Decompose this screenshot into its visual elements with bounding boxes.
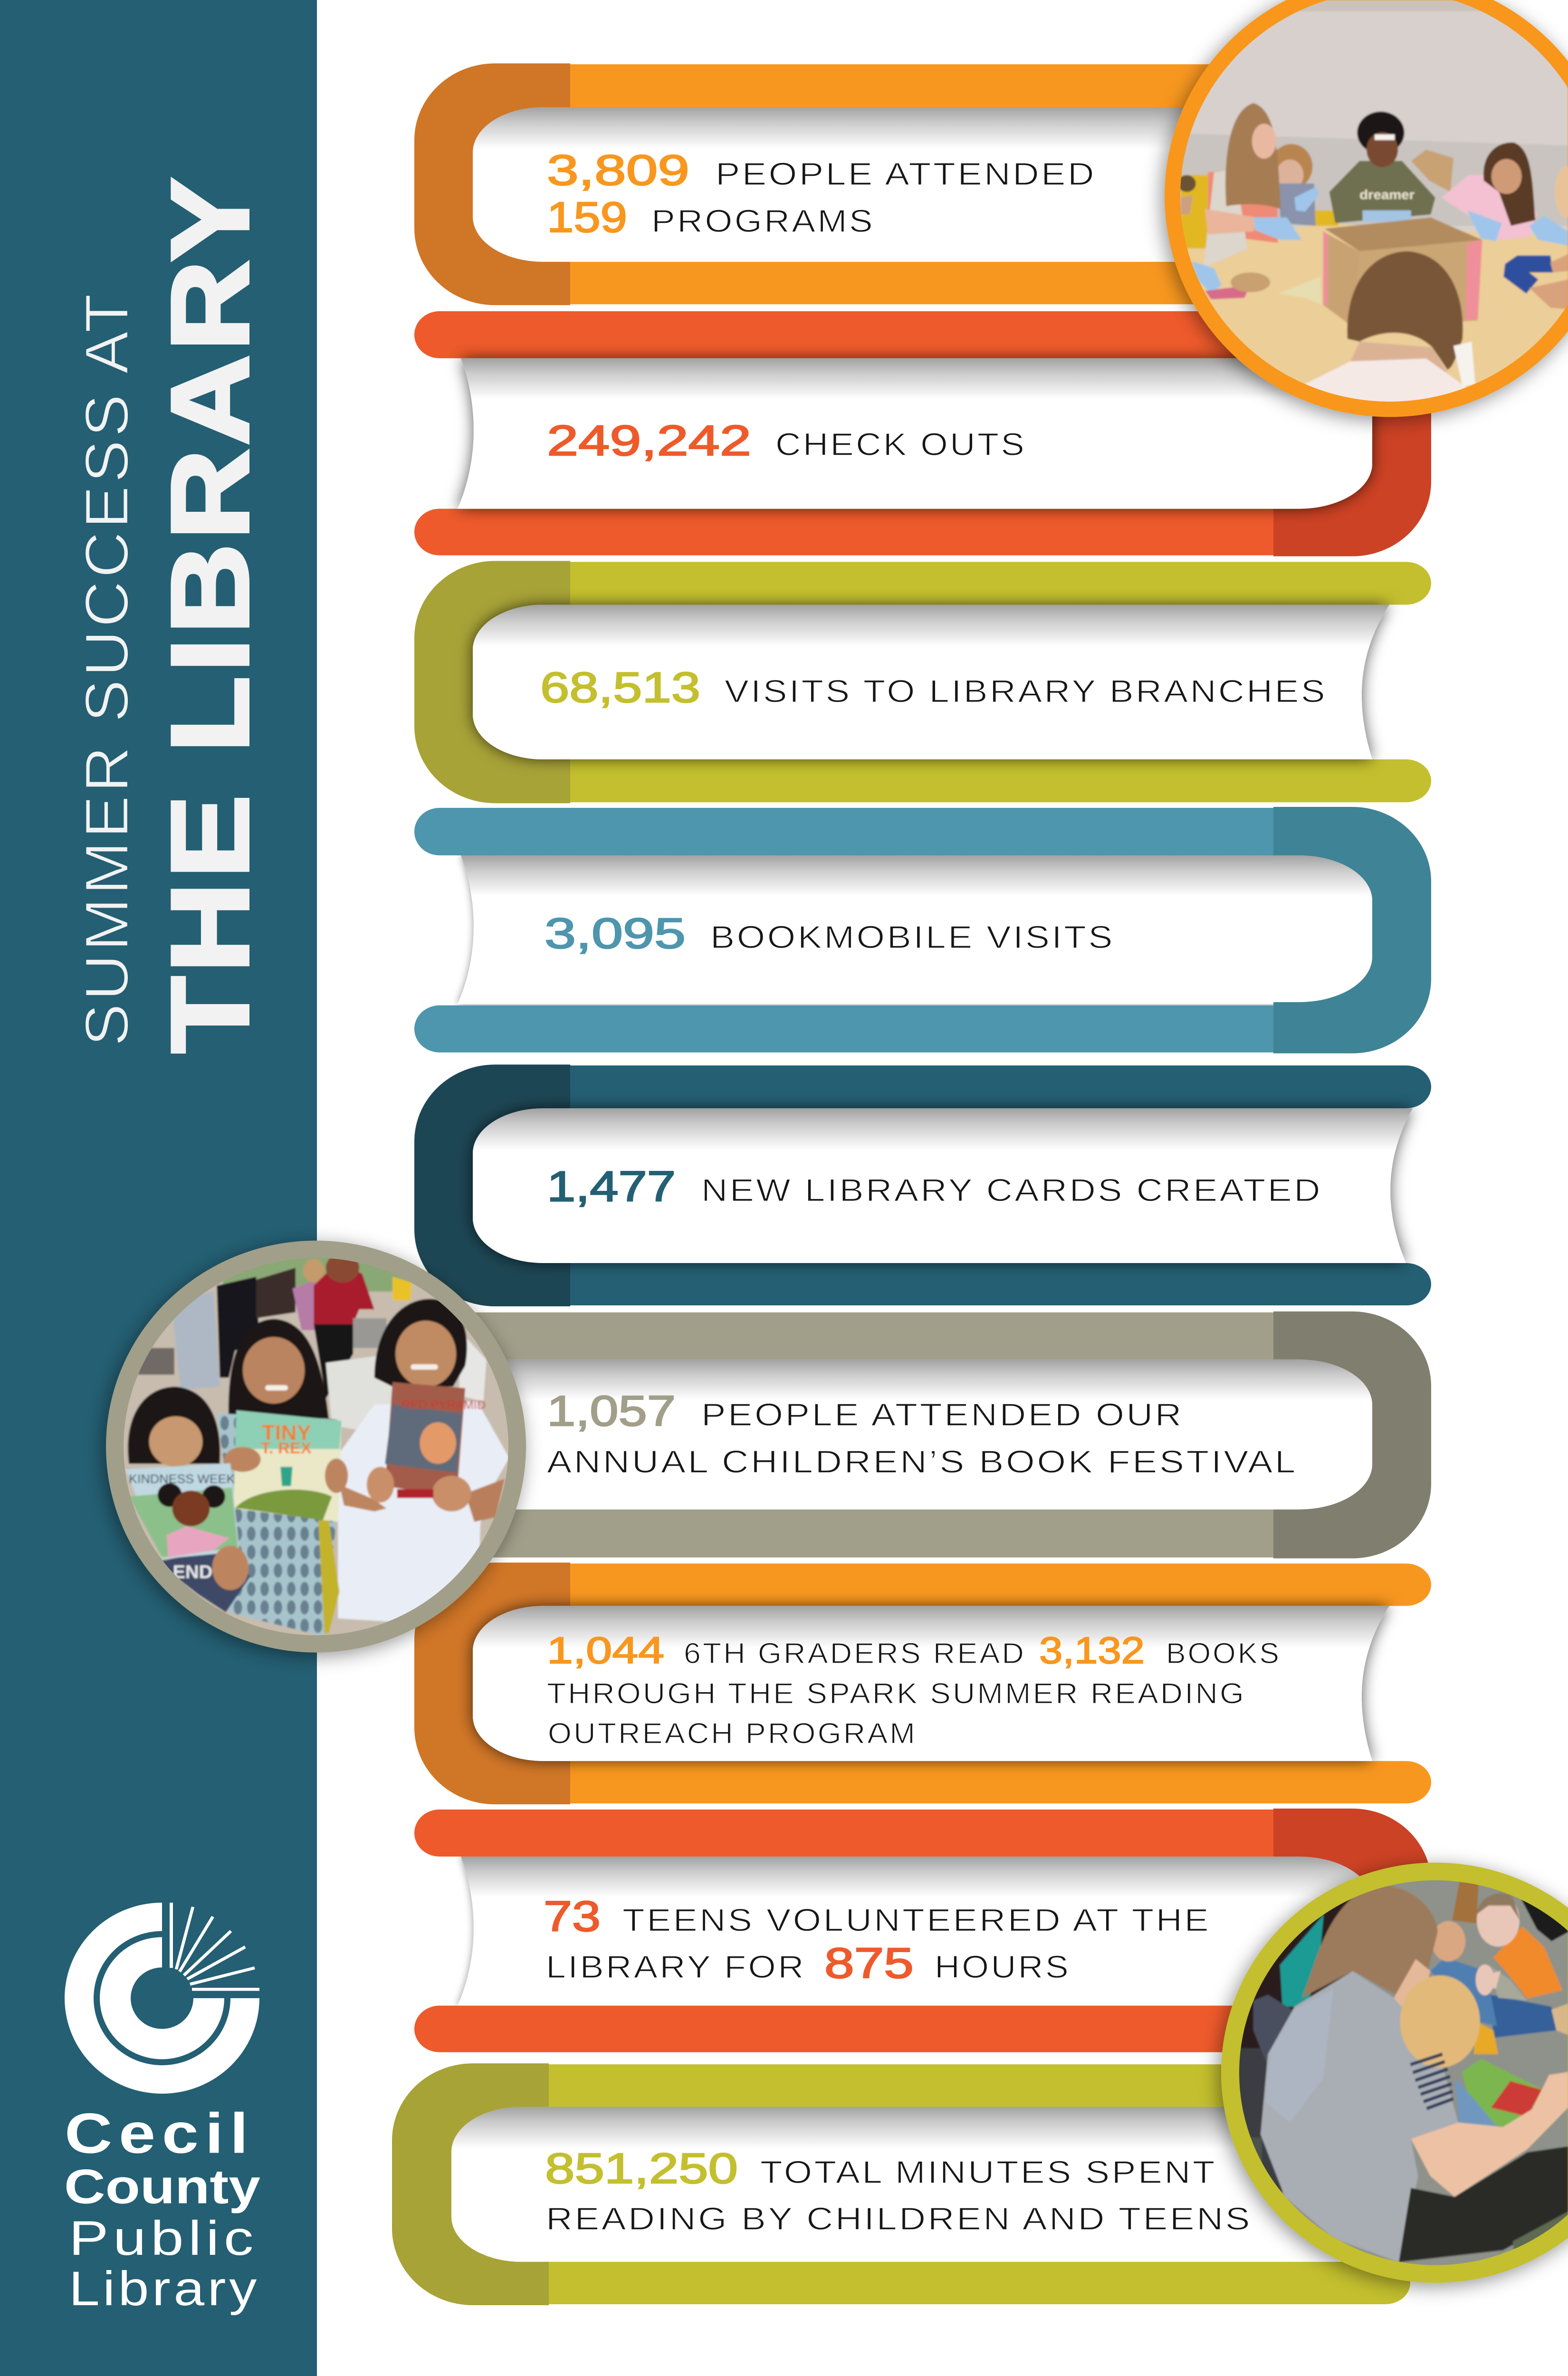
- book 9 stat text: TOTAL MINUTES SPENT: [760, 2155, 1217, 2190]
- book 8 stat text: 73: [544, 1893, 601, 1941]
- book 1 stat text: PEOPLE ATTENDED: [716, 157, 1096, 192]
- photo circle: children holding books: TINY: [262, 1421, 311, 1445]
- book 2 stat text: 249,242: [547, 417, 751, 465]
- book 7 stat text: BOOKS: [1166, 1638, 1281, 1670]
- book 3 stat text: VISITS TO LIBRARY BRANCHES: [725, 674, 1327, 709]
- book 6: taupe: [414, 1312, 1431, 1558]
- book 9 stat text: READING BY CHILDREN AND TEENS: [546, 2202, 1252, 2237]
- book 7: orange: [414, 1562, 1431, 1804]
- book 6 stat text: ANNUAL CHILDREN’S BOOK FESTIVAL: [547, 1445, 1298, 1480]
- book 4 stat text: 3,095: [545, 910, 686, 958]
- book 8 stat text: TEENS VOLUNTEERED AT THE: [622, 1903, 1211, 1938]
- book 4 stat text: BOOKMOBILE VISITS: [710, 920, 1115, 955]
- logo wordmark: County: [64, 2159, 260, 2213]
- logo wordmark: Library: [69, 2261, 260, 2316]
- book 9: lime: [392, 2063, 1410, 2305]
- book 7 stat text: OUTREACH PROGRAM: [548, 1717, 917, 1750]
- book 3 stat text: 68,513: [540, 664, 700, 711]
- book 7 stat text: 6TH GRADERS READ: [684, 1638, 1026, 1670]
- book 6 stat text: [547, 1388, 1298, 1480]
- book 3 stat text: [540, 664, 1327, 711]
- book 3: lime: [414, 561, 1431, 803]
- book 7 stat text: [547, 1629, 1281, 1750]
- book 5 stat text: NEW LIBRARY CARDS CREATED: [701, 1173, 1322, 1208]
- logo mark: [65, 1903, 259, 2094]
- title: summer success at the library: [73, 174, 271, 1054]
- logo wordmark: Cecil: [65, 2101, 255, 2165]
- book 4 stat text: [545, 910, 1115, 958]
- book 8 stat text: 875: [824, 1940, 914, 1987]
- book 1 stat text: [547, 147, 1096, 241]
- book 5 stat text: 1,477: [547, 1163, 676, 1210]
- book 8 stat text: LIBRARY FOR: [546, 1949, 806, 1985]
- book 2 stat text: CHECK OUTS: [775, 427, 1026, 462]
- photo circle: children holding books: END: [173, 1562, 212, 1582]
- title line 2: THE LIBRARY: [148, 174, 271, 1054]
- photo circle: children holding books: [102, 1241, 526, 1657]
- book 9 stat text: [545, 2145, 1252, 2237]
- photo circle: kids crafting at a table: [1154, 0, 1568, 423]
- book 5: teal: [414, 1064, 1431, 1306]
- book 9 stat text: 851,250: [545, 2145, 738, 2193]
- sidebar panel: [0, 0, 317, 2376]
- book 6 stat text: PEOPLE ATTENDED OUR: [701, 1398, 1184, 1433]
- photo circle: children holding books: RED PYRAMID: [402, 1399, 486, 1412]
- book 1 stat text: PROGRAMS: [651, 204, 875, 239]
- title line 1: SUMMER SUCCESS AT: [73, 291, 141, 1046]
- book 7 stat text: 1,044: [547, 1629, 664, 1671]
- book 1 stat text: 159: [547, 194, 627, 241]
- book 4: blue: [414, 807, 1431, 1054]
- book 1 stat text: 3,809: [547, 147, 689, 194]
- logo: Cecil County Public Library: [64, 1903, 260, 2316]
- book 6 stat text: 1,057: [547, 1388, 676, 1435]
- photo circle: children holding books: T. REX: [261, 1439, 312, 1457]
- book 8: red: [414, 1809, 1431, 2053]
- book 8 stat text: [544, 1893, 1211, 1987]
- book 5 stat text: [547, 1163, 1322, 1210]
- book 8 stat text: HOURS: [935, 1949, 1071, 1985]
- book 7 stat text: 3,132: [1039, 1629, 1145, 1671]
- logo wordmark: [64, 2101, 260, 2316]
- logo wordmark: Public: [69, 2211, 258, 2265]
- book 2: red: [414, 310, 1431, 556]
- book 7 stat text: THROUGH THE SPARK SUMMER READING: [547, 1677, 1246, 1710]
- book 2 stat text: [547, 417, 1026, 465]
- photo circle: children holding books: KINDNESS WEEK: [129, 1472, 235, 1486]
- photo circle: woman reading with toddlers: [1221, 1863, 1568, 2286]
- photo circle: kids crafting at a table: dreamer: [1359, 188, 1415, 202]
- book 1: orange: [414, 63, 1431, 305]
